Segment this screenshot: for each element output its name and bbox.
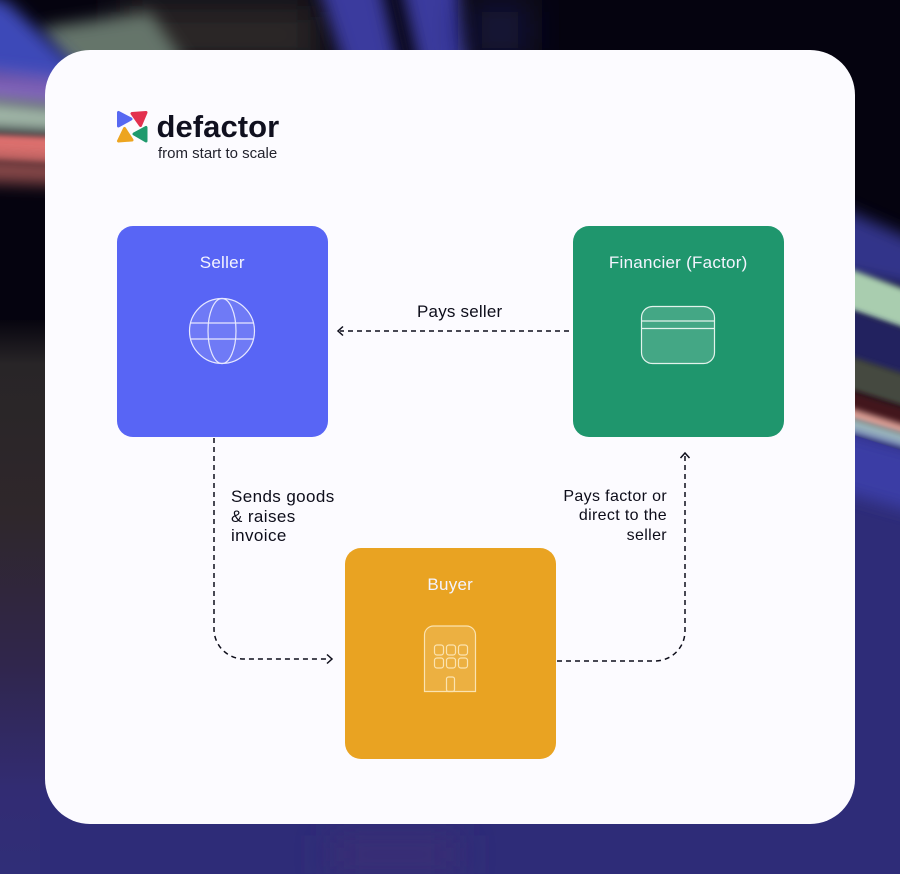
icon: card	[640, 306, 716, 364]
logo	[116, 109, 279, 162]
bottom band	[40, 790, 900, 874]
right streaks	[800, 190, 900, 300]
icon: defactor mark	[116, 110, 148, 142]
panel: seller	[117, 226, 328, 436]
panel: buyer	[345, 548, 556, 758]
heading: seller: Seller	[200, 253, 245, 272]
label: pays factor: Pays factor or	[563, 488, 667, 504]
label: pays factor: direct to the	[579, 507, 667, 524]
label: pays factor: seller	[627, 526, 667, 544]
label: pays seller: Pays seller	[417, 302, 502, 321]
heading: financier: Financier (Factor)	[609, 253, 748, 272]
main card	[45, 50, 855, 824]
label: sends goods: invoice	[231, 526, 287, 545]
label: sends goods: Sends goods	[231, 487, 335, 506]
label: pays factor	[563, 488, 667, 544]
panel: financier	[573, 226, 784, 436]
heading: buyer: Buyer	[427, 575, 473, 594]
arrow: sends goods	[213, 438, 333, 664]
arrow: pays seller	[337, 326, 569, 336]
icon: globe	[188, 298, 256, 364]
top streaks	[120, 0, 320, 70]
left streaks	[0, 0, 80, 100]
arrow: pays factor	[557, 452, 690, 662]
left lower glow	[0, 320, 160, 874]
label: sends goods: & raises	[231, 506, 296, 526]
tagline: from start to scale	[158, 145, 277, 162]
icon: building	[424, 625, 476, 692]
label: sends goods	[231, 487, 335, 545]
wordmark: defactor	[156, 109, 279, 144]
